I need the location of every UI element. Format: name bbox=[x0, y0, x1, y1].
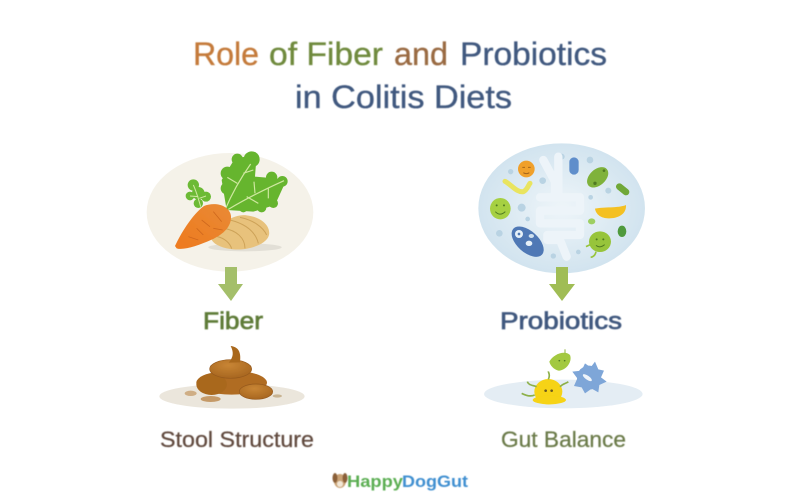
arrow: fiber down bbox=[218, 267, 243, 301]
heading: probiotics: Probiotics bbox=[500, 308, 622, 335]
title: in Colitis Diets bbox=[295, 79, 512, 115]
title: Role bbox=[193, 36, 259, 72]
heading: fiber: Fiber bbox=[203, 308, 263, 335]
logo: HappyDogGut: DogGut bbox=[402, 472, 468, 491]
title: of Fiber bbox=[269, 36, 383, 72]
panel: fiber bbox=[147, 151, 314, 452]
logo: HappyDogGut bbox=[332, 472, 468, 491]
title bbox=[193, 36, 607, 115]
title: and bbox=[394, 36, 448, 72]
icon: carrot and root slice on cream circle bbox=[147, 151, 313, 272]
icon: balanced microbes on blue plate bbox=[484, 349, 643, 408]
icon: gut and microbes on blue circle bbox=[478, 143, 645, 273]
title: Probiotics bbox=[460, 36, 607, 72]
icon: dog bbox=[332, 473, 348, 488]
label: gut balance: Gut Balance bbox=[501, 427, 626, 452]
arrow: probiotics down bbox=[549, 267, 575, 301]
icon: stool on plate bbox=[159, 346, 305, 409]
label: stool structure: Stool Structure bbox=[160, 427, 314, 452]
panel: probiotics bbox=[478, 143, 645, 452]
logo: HappyDogGut: Happy bbox=[347, 472, 404, 491]
icon: intestine bbox=[540, 157, 580, 257]
